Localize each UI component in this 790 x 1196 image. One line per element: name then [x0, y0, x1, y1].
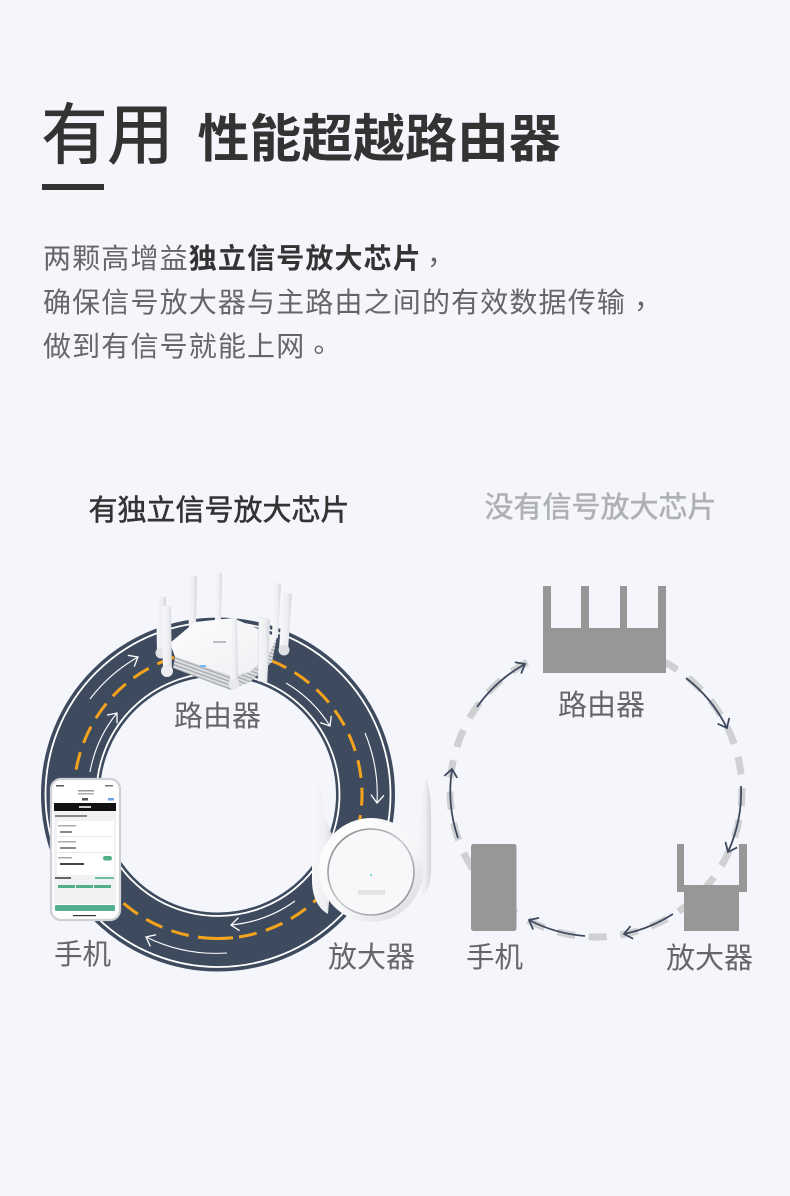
dashed weak signal ring	[450, 659, 742, 937]
title: 有用	[42, 98, 174, 172]
intro text block: 做到有信号就能上网	[43, 331, 305, 362]
icon: router silhouette	[543, 586, 666, 673]
title: 性能超越路由器	[198, 110, 561, 168]
label: amplifier: 放大器	[666, 942, 753, 975]
intro text block: 确保信号放大器与主路由之间的有效数据传输	[43, 287, 626, 318]
intro text block	[43, 239, 663, 362]
label: router: 路由器	[558, 689, 645, 722]
panel: left road ring diagram	[46, 572, 431, 974]
title underline	[42, 184, 104, 190]
icon: phone silhouette	[471, 844, 516, 931]
panel: right dashed ring diagram	[450, 586, 753, 975]
icon: router photo	[156, 572, 292, 690]
label: amplifier: 放大器	[328, 941, 415, 974]
signal arrows	[450, 664, 741, 936]
icon: amplifier silhouette	[677, 844, 747, 931]
road arrows	[90, 657, 377, 953]
title	[42, 98, 561, 172]
intro text block: 两颗高增益独立信号放大芯片	[43, 243, 422, 274]
intro text block: ，	[634, 283, 663, 314]
label: phone: 手机	[466, 942, 523, 974]
icon: phone app screenshot	[51, 779, 120, 920]
road ring	[46, 622, 390, 967]
intro text block: 。	[313, 327, 343, 358]
intro text block: ，	[427, 239, 456, 270]
heading: without chip: 没有信号放大芯片	[484, 491, 717, 524]
label: phone: 手机	[54, 939, 111, 971]
label: router: 路由器	[174, 700, 261, 733]
icon: amplifier photo	[312, 778, 431, 922]
heading: with independent chip: 有独立信号放大芯片	[88, 494, 350, 527]
